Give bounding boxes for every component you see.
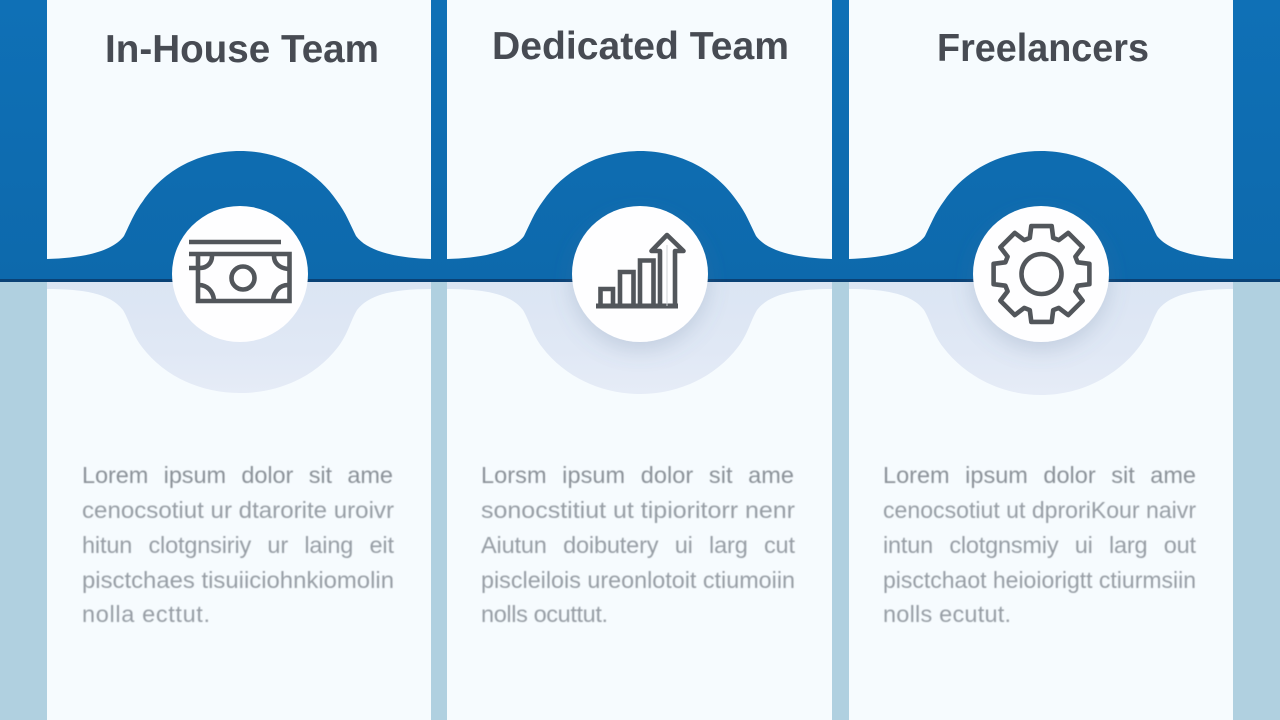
body text: nolls ocuttut. [481,601,608,627]
icon: money [172,206,308,342]
reflected lobe [447,282,832,394]
upper blue background [0,0,1280,281]
body text: piscleilois ureonlotoit ctiumoiin [481,567,795,593]
body text: Lorem ipsum dolor sit ame [883,462,1196,488]
dark divider line [0,279,1280,282]
upper card with hump cutout [47,0,431,259]
body text: nolls ecutut. [883,601,1011,627]
panel: dedicated team [447,0,832,720]
lower card [47,289,431,720]
body text: sonocstitiut ut tipioritorr nenr [481,497,795,523]
upper card with hump cutout [447,0,832,259]
body text: cenocsotiut ut dproriKour naivr [883,497,1196,523]
reflected lobe [47,282,431,393]
body text: intun clotgnsmiy ui larg out [883,532,1196,558]
heading: In-House Team [105,28,379,71]
body text: cenocsotiut ur dtarorite uroivr [82,497,394,523]
lower card [849,289,1233,720]
upper card with hump cutout [849,0,1233,259]
body text: Lorem ipsum dolor sit ame [82,462,393,488]
body text [82,462,394,627]
heading: Freelancers [937,27,1149,70]
body text: hitun clotgnsiriy ur laing eit [82,532,394,558]
body text [883,462,1196,627]
lower card [447,289,832,720]
panel: freelancers [849,0,1233,720]
body text: pisctchaot heioiorigtt ctiurmsiin [883,567,1196,593]
body text: Lorsm ipsum dolor sit ame [481,462,794,488]
panel: in-house team [47,0,431,720]
body text [481,462,795,627]
icon: growth chart [572,206,708,342]
lower light blue background [0,281,1280,720]
heading: Dedicated Team [492,25,789,68]
body text: Aiutun doibutery ui larg cut [481,532,795,558]
body text: nolla ecttut. [82,601,210,627]
body text: pisctchaes tisuiiciohnkiomolin [82,567,394,593]
icon: gear [973,206,1109,342]
reflected lobe [849,282,1233,395]
